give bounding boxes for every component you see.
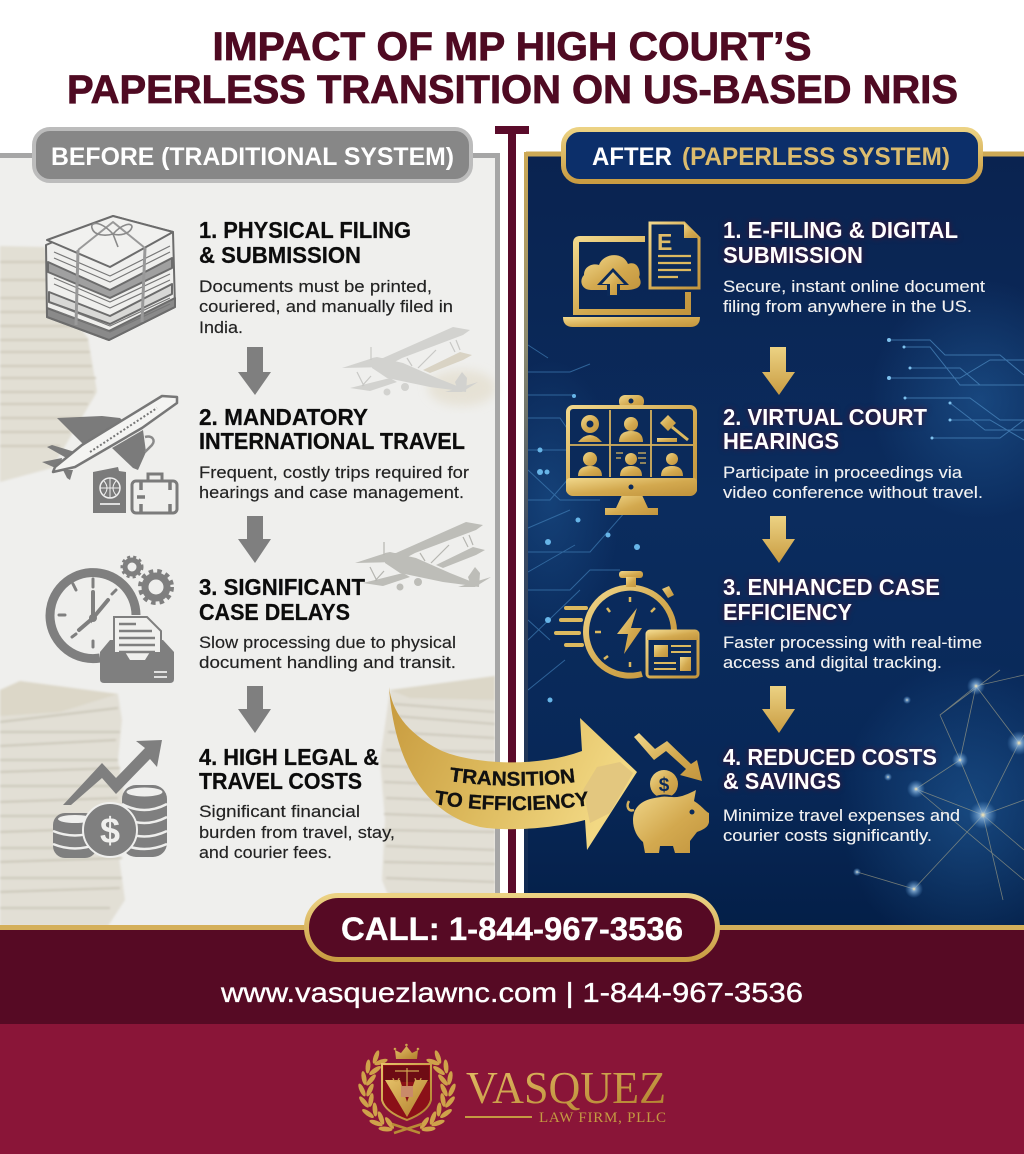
icon: document tray <box>100 617 174 683</box>
before item 4: costs: burden from travel, stay, <box>199 823 395 842</box>
panel: before (traditional system) <box>0 155 498 927</box>
glow: circuit region right <box>894 306 1024 492</box>
after item 1: e-filing <box>563 217 985 327</box>
heading: 2. VIRTUAL COURT <box>723 404 927 430</box>
logo: vasquez law firm <box>357 1044 666 1133</box>
paper pile background: upper left <box>0 246 97 482</box>
before item 4: costs: TRAVEL COSTS <box>199 768 362 794</box>
icon: bundled document stack <box>46 216 175 340</box>
icon: coin stacks: $ <box>100 810 120 851</box>
after item 4: savings: courier costs significantly. <box>723 826 932 845</box>
arrow: before 1 to 2 <box>238 347 271 395</box>
heading: 1. PHYSICAL FILING <box>199 217 411 243</box>
panel border: before <box>0 156 498 927</box>
circuit lines: right <box>889 340 1024 440</box>
after item 2: virtual hearings <box>566 395 983 515</box>
biplane watermark: lower <box>355 522 491 590</box>
panel: after (paperless system) <box>524 152 1024 925</box>
call button: CALL: 1-844-967-3536 <box>341 911 683 947</box>
icon: stopwatch with lightning <box>556 571 674 676</box>
wreath right <box>419 1050 457 1132</box>
before item 1: physical filing <box>46 216 453 340</box>
network stars <box>853 677 1024 898</box>
icon: video monitor grid <box>566 395 697 515</box>
icon: airplane <box>42 396 177 480</box>
arrow: after 1 to 2 <box>762 347 795 395</box>
logo wreath <box>357 1050 457 1133</box>
logo rule <box>465 1116 532 1118</box>
after header: (PAPERLESS SYSTEM) <box>682 143 950 171</box>
description: Participate in proceedings via <box>723 463 963 482</box>
after item 4: savings: & SAVINGS <box>723 768 841 794</box>
footer band: logo background <box>0 1024 1024 1154</box>
arrow: before 2 to 3 <box>238 516 271 563</box>
heading: 3. ENHANCED CASE <box>723 574 940 600</box>
description: Frequent, costly trips required for <box>199 463 469 482</box>
title: IMPACT OF MP HIGH COURT’S <box>212 25 812 69</box>
circuit lines: left <box>528 344 623 690</box>
heading: 1. E-FILING & DIGITAL <box>723 217 958 243</box>
network lines <box>857 670 1024 900</box>
arrow: after 2 to 3 <box>762 516 795 563</box>
heading: 2. MANDATORY <box>199 404 368 430</box>
description: Minimize travel expenses and <box>723 806 960 825</box>
title <box>67 25 958 112</box>
description: Significant financial <box>199 802 360 821</box>
before item 3: case delays <box>50 557 456 683</box>
arrow: transition to efficiency: TRANSITION <box>450 767 574 786</box>
before item 1: physical filing: India. <box>199 318 243 337</box>
arrow: transition to efficiency: TO EFFICIENCY <box>436 790 588 810</box>
heading: 4. REDUCED COSTS <box>723 744 937 770</box>
title: PAPERLESS TRANSITION ON US-BASED NRIS <box>67 68 958 112</box>
call button <box>306 896 718 960</box>
description: Documents must be printed, <box>199 277 432 296</box>
description: Secure, instant online document <box>723 277 985 296</box>
glow: circuit region left <box>528 402 598 598</box>
paper pile background: lower right <box>380 676 495 926</box>
icon: gears <box>122 557 172 603</box>
icon: clock <box>50 573 136 659</box>
footer band: contact <box>0 925 1024 1024</box>
before item 4: costs: and courier fees. <box>199 843 332 862</box>
after item 3: efficiency <box>556 571 982 677</box>
icon: browser window <box>647 631 698 677</box>
after item 4: savings <box>628 733 960 853</box>
after header <box>564 130 980 182</box>
description: Slow processing due to physical <box>199 633 456 652</box>
panel border: after <box>526 152 1024 156</box>
before item 1: physical filing: & SUBMISSION <box>199 242 361 268</box>
before item 1: physical filing: couriered, and manually filed in <box>199 297 453 316</box>
icon: falling arrow <box>634 733 702 781</box>
icon: document <box>650 223 699 288</box>
after item 3: efficiency: EFFICIENCY <box>723 599 852 625</box>
wreath ribbon <box>392 1124 422 1133</box>
before item 2: international travel: hearings and case management. <box>199 483 464 502</box>
description: Faster processing with real-time <box>723 633 982 652</box>
wreath left <box>357 1050 395 1132</box>
heading: 3. SIGNIFICANT <box>199 574 365 600</box>
icon: laptop with cloud upload <box>563 239 700 327</box>
arrow: before 3 to 4 <box>238 686 271 733</box>
circuit nodes: right <box>887 338 952 440</box>
after item 2: virtual hearings: video conference without travel. <box>723 483 983 502</box>
panel glows and network art <box>480 280 1024 960</box>
paper pile background: lower left <box>0 681 125 926</box>
icon: piggy bank with coin <box>628 770 709 853</box>
arrow: transition to efficiency <box>389 688 637 850</box>
logo shield <box>382 1064 431 1120</box>
before header <box>34 129 471 181</box>
after item 1: e-filing: filing from anywhere in the US. <box>723 297 972 316</box>
before item 3: case delays: document handling and transit. <box>199 653 456 672</box>
icon: suitcase <box>132 474 177 513</box>
icon: document: E <box>657 229 672 255</box>
after item 1: e-filing: SUBMISSION <box>723 242 863 268</box>
before item 2: international travel: INTERNATIONAL TRAVEL <box>199 428 465 454</box>
after item 2: virtual hearings: HEARINGS <box>723 428 839 454</box>
logo crown <box>394 1044 419 1059</box>
arrow: after 3 to 4 <box>762 686 795 733</box>
heading: 4. HIGH LEGAL & <box>199 744 379 770</box>
before header: BEFORE (TRADITIONAL SYSTEM) <box>51 143 454 171</box>
website and phone: www.vasquezlawnc.com | 1-844-967-3536 <box>220 977 803 1008</box>
after header: AFTER <box>592 143 672 171</box>
logo subtitle: LAW FIRM, PLLC <box>539 1110 666 1126</box>
icon: passport <box>93 467 126 513</box>
before item 3: case delays: CASE DELAYS <box>199 599 350 625</box>
after item 3: efficiency: access and digital tracking. <box>723 653 942 672</box>
biplane watermark: upper <box>342 327 478 396</box>
before item 4: costs <box>53 740 395 862</box>
logo wordmark: VASQUEZ <box>466 1062 666 1113</box>
glow: network region <box>866 691 1024 925</box>
icon: rising arrow <box>63 740 162 805</box>
center divider <box>495 126 529 926</box>
before item 2: international travel <box>42 396 469 513</box>
stain under upper biplane <box>428 370 496 406</box>
icon: piggy bank with coin: $ <box>659 775 670 796</box>
circuit nodes: left <box>537 394 640 702</box>
icon: coin stacks <box>53 785 167 858</box>
